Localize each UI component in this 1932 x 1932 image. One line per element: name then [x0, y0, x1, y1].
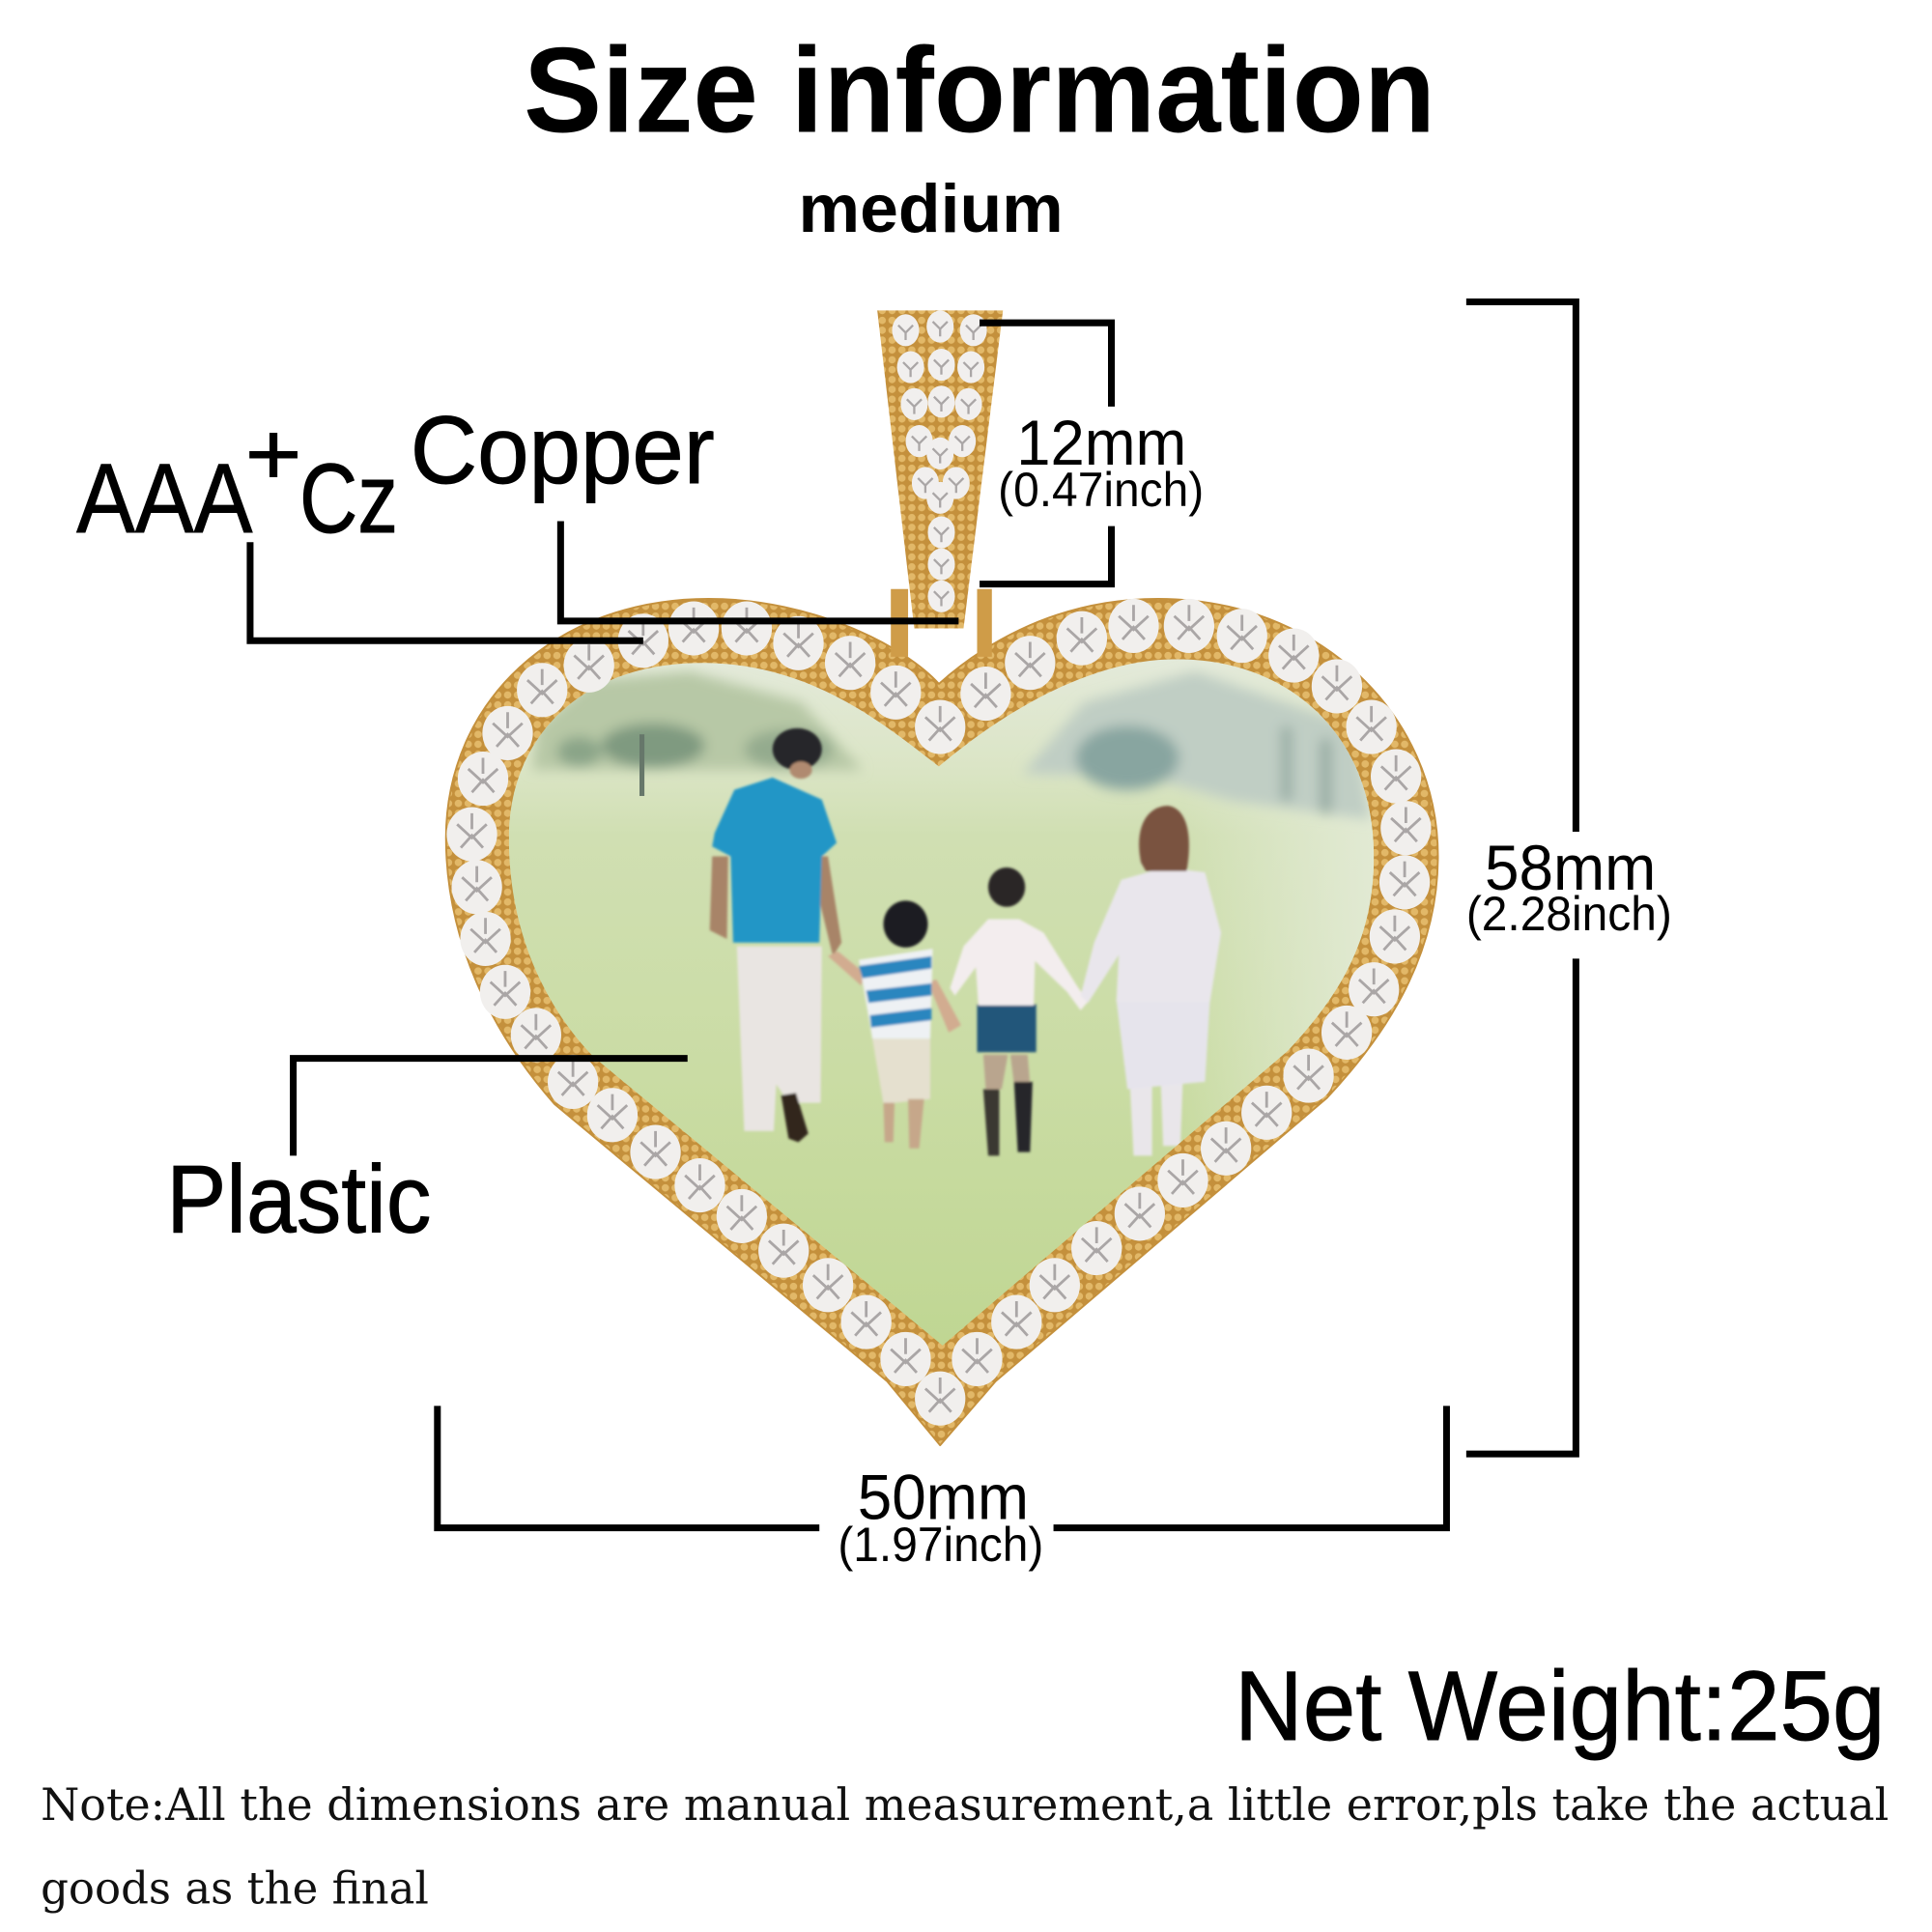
bail height bracket [980, 323, 1112, 584]
dimension: 58mm: 58mm [1485, 833, 1656, 904]
note: Note:All the dimensions are manual measurement,a little error,pls take the actual [41, 1778, 1889, 1831]
mother [1081, 806, 1221, 1155]
label: Copper: Copper [411, 397, 715, 504]
leader line: Plastic [294, 1059, 688, 1155]
dimension: 50mm [838, 1463, 1043, 1572]
dimension: 50mm: 50mm [858, 1463, 1029, 1534]
leader line: AAA+Cz [250, 542, 643, 640]
label: Plastic: Plastic [166, 1147, 431, 1254]
boy [828, 900, 961, 1149]
diamond bail [877, 310, 1003, 629]
subtitle: medium: medium [799, 170, 1064, 246]
girl [950, 867, 1088, 1155]
total height bracket [1466, 301, 1576, 1454]
note: goods as the final [41, 1862, 429, 1915]
dimension: 58mm [1466, 833, 1672, 941]
dimension: 12mm: 12mm [1016, 408, 1186, 479]
note [41, 1778, 1889, 1915]
background trees [532, 671, 1370, 819]
dimension: 12mm [998, 408, 1204, 517]
label: AAA+Cz: Cz [299, 443, 398, 554]
label: AAA+Cz: AAA [76, 443, 252, 554]
pendant illustration [446, 310, 1438, 1445]
father [710, 728, 841, 1142]
dimension: 58mm: (2.28inch) [1466, 887, 1672, 941]
tree trunk [639, 734, 644, 796]
dimension: 50mm: (1.97inch) [838, 1518, 1043, 1572]
label: AAA+Cz: + [245, 405, 301, 503]
heart gold bezel [446, 599, 1438, 1445]
bezel stones [446, 599, 1432, 1426]
leader line: Copper [560, 522, 958, 621]
net weight: Net Weight:25g [1235, 1651, 1886, 1761]
bail rings [891, 589, 992, 657]
dimension: 12mm: (0.47inch) [998, 463, 1204, 517]
photo of family in a field [493, 653, 1392, 1355]
title: Size information [524, 23, 1435, 157]
width bracket [438, 1406, 1446, 1528]
label: AAA+Cz [76, 405, 398, 554]
